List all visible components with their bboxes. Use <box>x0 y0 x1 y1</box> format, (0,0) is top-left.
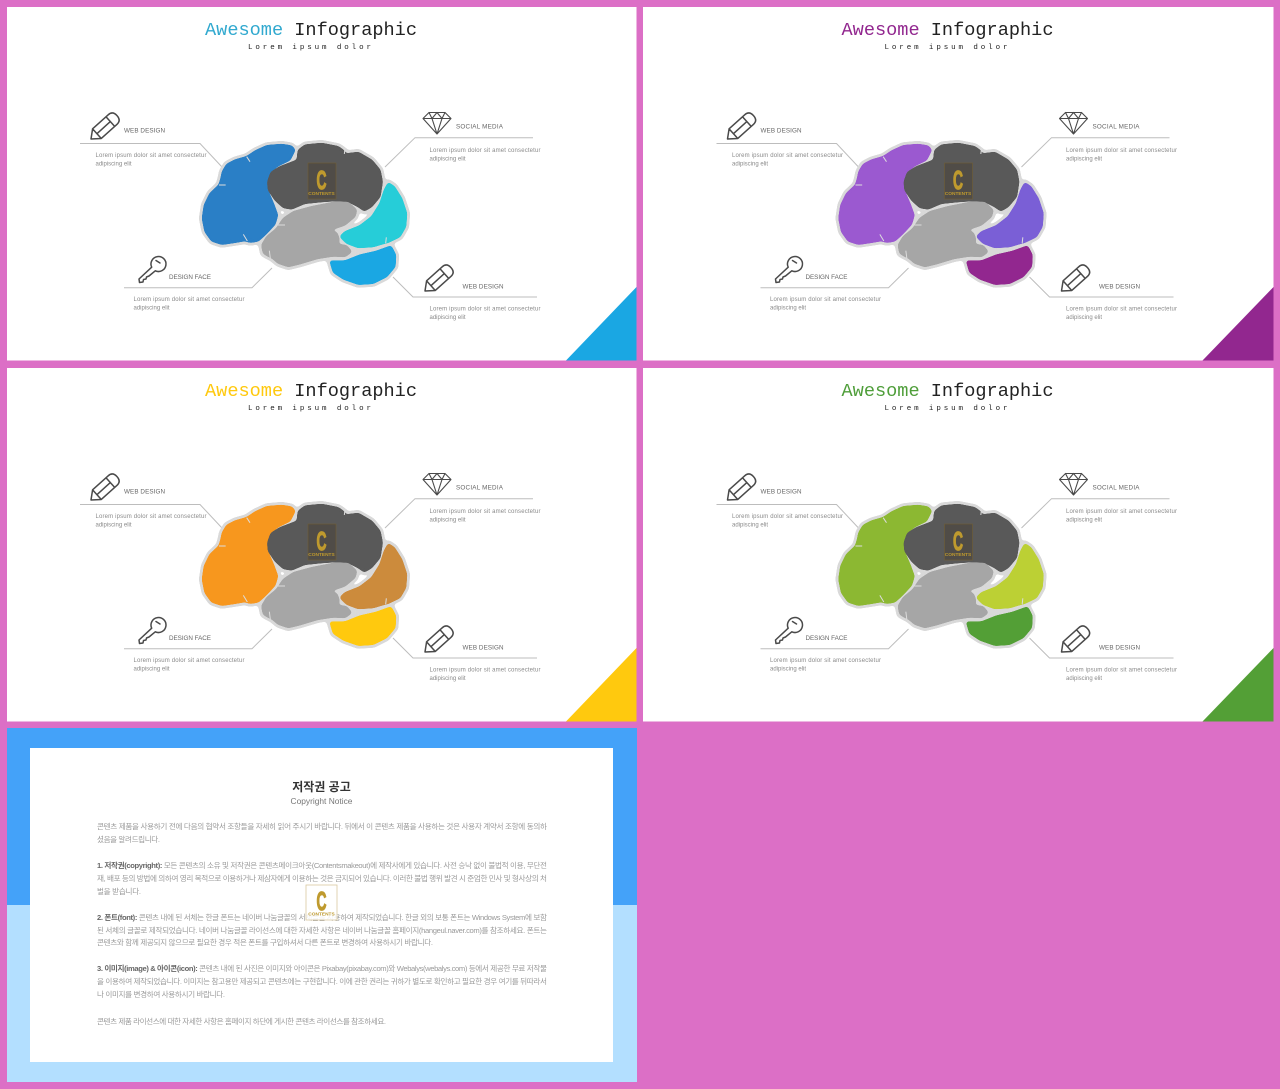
subtitle: Lorem ipsum dolor <box>248 405 371 413</box>
lobe: cerebellum <box>966 607 1032 645</box>
icon: diamond <box>1060 112 1088 134</box>
label: web design top left: adipiscing elit <box>96 522 132 528</box>
notice intro <box>97 821 547 844</box>
notice heading: 저작권 공고 <box>292 779 351 794</box>
title: Awesome Infographic <box>842 20 1054 41</box>
label: web design top left: WEB DESIGN <box>124 488 165 496</box>
title: Awesome Infographic <box>205 381 417 402</box>
label: social media: SOCIAL MEDIA <box>1092 124 1140 130</box>
brain diagram <box>202 504 407 645</box>
label: social media: adipiscing elit <box>430 156 466 162</box>
section: image and icon: 3. 이미지(image) & 아이콘(icon): 콘텐츠 내에 된 사진은 이미지와 아이콘은 Pixabay(pixabay.com)와 Webalys(webalys.com) 등에서 제공한 무료 저작물 <box>97 963 547 973</box>
label: social media: Lorem ipsum dolor sit amet consectetur <box>430 509 540 515</box>
label: web design bottom right: adipiscing elit <box>430 315 466 321</box>
icon: diamond <box>423 112 451 134</box>
leader lines <box>716 499 1174 658</box>
lobe: parietal <box>904 143 1019 211</box>
corner triangle <box>566 648 636 722</box>
label: design face <box>770 274 881 312</box>
label: design face: adipiscing elit <box>134 666 170 672</box>
icon: pencil <box>421 624 455 657</box>
label: design face: DESIGN FACE <box>169 274 211 281</box>
label: social media: adipiscing elit <box>430 518 466 524</box>
lobe: parietal <box>904 504 1019 572</box>
lobe: cerebellum <box>966 246 1032 284</box>
label: social media: Lorem ipsum dolor sit amet consectetur <box>430 148 540 154</box>
label: web design top left: WEB DESIGN <box>124 128 165 134</box>
label: social media: Lorem ipsum dolor sit amet consectetur <box>1066 148 1177 154</box>
label: web design top left: Lorem ipsum dolor sit amet consectetur <box>732 514 843 520</box>
subtitle: Lorem ipsum dolor <box>884 44 1008 52</box>
icon: key <box>776 257 802 282</box>
lobe: temporal <box>262 563 357 628</box>
label: design face: Lorem ipsum dolor sit amet consectetur <box>134 658 244 664</box>
label: web design top left: WEB DESIGN <box>760 128 802 134</box>
logo watermark <box>308 163 336 199</box>
section: copyright: 재, 배포 등의 방법에 의하여 영리 목적으로 이용하거나 제삼자에게 이용하는 것은 금지되어 있습니다. 이러한 불법 행위 발견 시 준엄한 민사 및 형사상의 처 <box>97 873 547 883</box>
logo watermark: C <box>316 526 327 556</box>
label: web design bottom right <box>1066 284 1177 321</box>
icon: pencil <box>87 472 121 505</box>
lobe: parietal <box>268 504 382 572</box>
panel: purple infographic <box>643 7 1274 360</box>
label: social media: SOCIAL MEDIA <box>456 124 504 130</box>
label: social media: SOCIAL MEDIA <box>1092 484 1140 492</box>
label: web design top left: Lorem ipsum dolor sit amet consectetur <box>96 153 206 159</box>
icon: diamond <box>423 474 451 495</box>
label: web design bottom right <box>430 644 540 682</box>
brain diagram <box>202 143 407 284</box>
logo watermark: C <box>316 165 327 195</box>
lobe: cerebellum <box>330 246 396 284</box>
title: Awesome Infographic <box>842 381 1054 402</box>
logo watermark: CONTENTS <box>308 912 335 918</box>
brain diagram <box>839 504 1043 645</box>
label: web design bottom right: WEB DESIGN <box>1099 284 1140 290</box>
title: Awesome Infographic <box>205 20 417 41</box>
notice footer: 콘텐츠 제품 라이선스에 대한 자세한 사항은 홈페이지 하단에 게시한 콘텐츠 라이선스를 참조하세요. <box>97 1016 386 1026</box>
corner triangle <box>1202 648 1274 722</box>
icon: diamond <box>1060 474 1088 495</box>
logo watermark: C <box>316 886 327 916</box>
label: web design bottom right <box>1066 644 1177 682</box>
section: font: 콘텐츠와 함께 제공되지 않으므로 필요한 경우 적은 폰트를 구입하셔서 다른 폰트로 변경하여 사용하시기 바랍니다. <box>97 937 433 947</box>
brain diagram <box>839 143 1043 284</box>
label: web design top left: Lorem ipsum dolor sit amet consectetur <box>732 153 843 159</box>
notice intro: 셨음을 알려드립니다. <box>97 834 160 844</box>
label: web design top left <box>732 128 843 167</box>
section: font: 된 서체의 글꼴로 제작되었습니다. 네이버 나눔글꼴 라이선스에 대한 자세한 사항은 네이버 나눔글꼴 홈페이지(hangeul.naver.com)를 참조하세요. 폰트는 <box>97 925 547 935</box>
icon: key <box>776 618 802 644</box>
panel: orange infographic <box>7 368 636 722</box>
label: web design top left: adipiscing elit <box>732 161 768 167</box>
section: image and icon: 을 이용하여 제작되었습니다. 이미지는 참고용만 제공되고 콘텐츠에는 구현합니다. 이에 관한 권리는 귀하가 별도로 확인하고 필요한 경우 여기를 뒤따라서 <box>97 976 547 986</box>
label: design face: DESIGN FACE <box>169 635 211 642</box>
lobe: frontal <box>202 144 295 244</box>
lobe: parietal <box>268 143 382 211</box>
label: design face <box>770 635 881 672</box>
label: web design top left: WEB DESIGN <box>760 488 802 496</box>
label: social media <box>430 124 540 162</box>
label: design face: DESIGN FACE <box>806 274 848 281</box>
leader lines <box>80 499 537 658</box>
label: web design bottom right: adipiscing elit <box>430 676 466 682</box>
label: design face: adipiscing elit <box>134 306 170 312</box>
lobe: occipital <box>976 183 1043 248</box>
icon: pencil <box>87 111 121 144</box>
label: social media <box>430 484 540 524</box>
label: web design top left <box>96 488 206 528</box>
label: web design bottom right: Lorem ipsum dolor sit amet consectetur <box>1066 306 1177 312</box>
label: design face: DESIGN FACE <box>806 635 848 642</box>
label: design face <box>134 635 244 672</box>
lobe: occipital <box>340 544 407 609</box>
lobe: frontal <box>202 505 295 605</box>
label: web design top left <box>732 488 843 528</box>
label: web design top left <box>96 128 206 167</box>
notice subheading: Copyright Notice <box>291 796 353 806</box>
icon: pencil <box>723 472 758 505</box>
label: web design top left: adipiscing elit <box>96 161 132 167</box>
logo watermark: CONTENTS <box>945 552 972 558</box>
label: web design bottom right: WEB DESIGN <box>462 644 504 652</box>
corner triangle <box>566 287 636 360</box>
label: web design bottom right: Lorem ipsum dolor sit amet consectetur <box>1066 668 1177 674</box>
icon: key <box>139 618 166 644</box>
label: design face: Lorem ipsum dolor sit amet consectetur <box>770 658 881 664</box>
logo watermark <box>944 524 972 560</box>
section: copyright: 벌을 받습니다. <box>97 886 141 896</box>
label: social media: adipiscing elit <box>1066 156 1102 162</box>
label: social media: Lorem ipsum dolor sit amet consectetur <box>1066 509 1177 515</box>
notice card <box>30 748 613 1062</box>
lobe: temporal <box>898 202 993 267</box>
icon: pencil <box>1057 263 1092 296</box>
icon: pencil <box>421 263 455 296</box>
label: web design bottom right: WEB DESIGN <box>462 284 504 290</box>
logo watermark: CONTENTS <box>308 191 335 197</box>
logo watermark <box>306 885 337 920</box>
section: image and icon <box>97 963 547 999</box>
lobe: occipital <box>340 183 407 248</box>
label: design face: adipiscing elit <box>770 666 806 672</box>
label: social media <box>1066 124 1177 162</box>
lobe: frontal <box>839 144 931 244</box>
lobe: cerebellum <box>330 607 396 645</box>
logo watermark: CONTENTS <box>308 552 335 558</box>
section: font <box>97 912 547 947</box>
label: social media: SOCIAL MEDIA <box>456 484 504 492</box>
icon: key <box>139 257 166 282</box>
label: social media: adipiscing elit <box>1066 518 1102 524</box>
corner triangle <box>1202 287 1274 360</box>
lobe: temporal <box>898 563 993 628</box>
label: web design top left: adipiscing elit <box>732 522 768 528</box>
logo watermark: C <box>953 526 963 556</box>
label: design face: Lorem ipsum dolor sit amet consectetur <box>770 297 881 303</box>
label: web design bottom right: WEB DESIGN <box>1099 644 1140 652</box>
label: design face: Lorem ipsum dolor sit amet consectetur <box>134 297 244 303</box>
panel: green infographic <box>643 368 1274 722</box>
section: font: 2. 폰트(font): 콘텐츠 내에 된 서체는 한글 폰트는 네이버 나눔글꼴의 서체들을 사용하여 제작되었습니다. 한글 외의 보통 폰트는 Windows System에 보함 <box>97 912 547 922</box>
logo watermark: C <box>953 165 963 195</box>
section: copyright: 1. 저작권(copyright): 모든 콘텐츠의 소유 및 저작권은 콘텐츠메이크아웃(Contentsmakeout)에 제작사에게 있습니다. 사전 승낙 없이 불법적 이용, 무단전 <box>97 860 547 870</box>
label: social media <box>1066 484 1177 524</box>
logo watermark <box>944 163 972 199</box>
leader lines <box>716 138 1174 297</box>
lobe: occipital <box>976 544 1043 609</box>
label: web design top left: Lorem ipsum dolor sit amet consectetur <box>96 514 206 520</box>
label: design face <box>134 274 244 312</box>
lobe: temporal <box>262 202 357 267</box>
leader lines <box>80 138 537 297</box>
icon: pencil <box>1057 624 1092 657</box>
logo watermark <box>308 524 336 560</box>
label: web design bottom right: adipiscing elit <box>1066 315 1102 321</box>
subtitle: Lorem ipsum dolor <box>884 405 1008 413</box>
logo watermark: CONTENTS <box>945 191 972 197</box>
panel: blue infographic <box>7 7 636 360</box>
icon: pencil <box>723 111 758 144</box>
subtitle: Lorem ipsum dolor <box>248 44 371 52</box>
panel: copyright notice <box>7 728 637 1082</box>
label: web design bottom right: Lorem ipsum dolor sit amet consectetur <box>430 668 540 674</box>
label: web design bottom right <box>430 284 540 321</box>
notice intro: 콘텐츠 제품을 사용하기 전에 다음의 협약서 조항들을 자세히 읽어 주시기 바랍니다. 뒤에서 이 콘텐츠 제품을 사용하는 것은 사용자 계약서 조항에 동의하 <box>97 821 547 831</box>
lobe: frontal <box>839 505 931 605</box>
section: image and icon: 나 이미지를 변경하여 사용하시기 바랍니다. <box>97 989 225 999</box>
label: web design bottom right: adipiscing elit <box>1066 676 1102 682</box>
label: web design bottom right: Lorem ipsum dolor sit amet consectetur <box>430 306 540 312</box>
label: design face: adipiscing elit <box>770 306 806 312</box>
section: copyright <box>97 860 547 896</box>
